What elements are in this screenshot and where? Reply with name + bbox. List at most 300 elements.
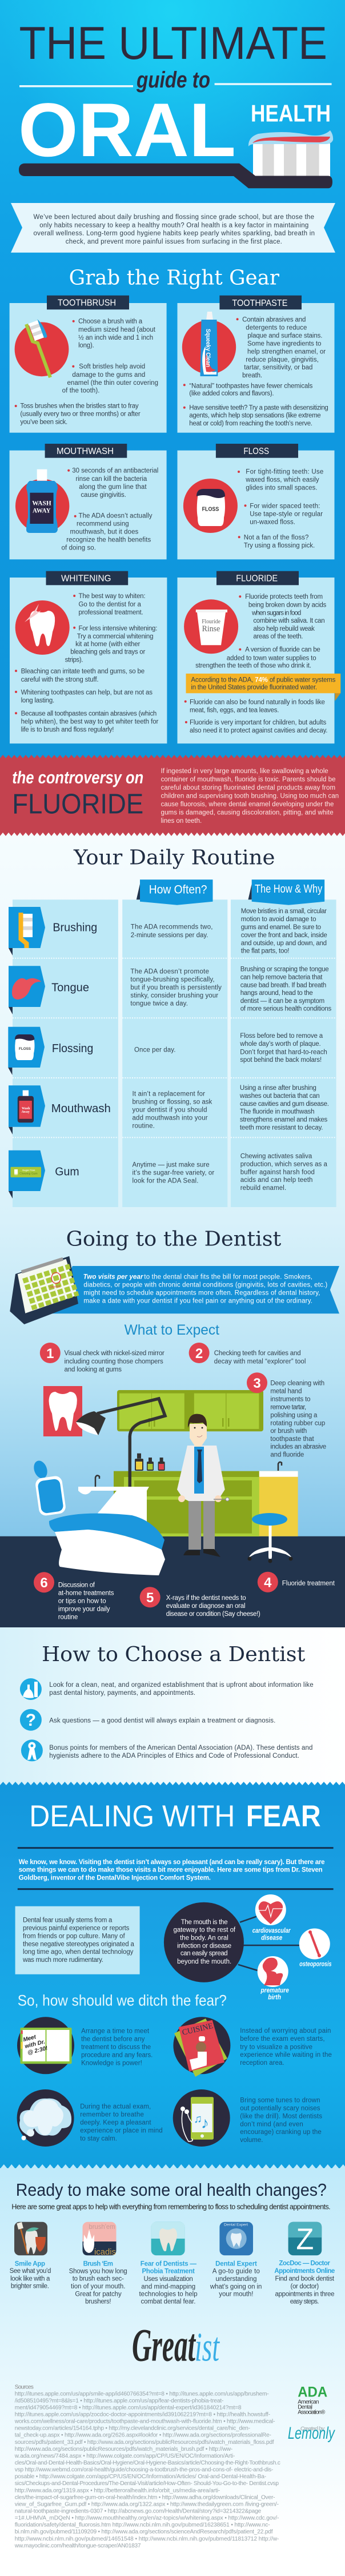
text: fluoride tips: A version of fluoride can be	[245, 646, 320, 653]
app: dental expert: what’s going on in	[210, 2283, 262, 2290]
tip: visualize positive: before the exam even starts,	[240, 2036, 325, 2043]
panel: dental fear	[15, 1906, 140, 1974]
icon: floss container: FLOSS	[202, 507, 219, 513]
icon: notebook	[17, 2017, 74, 2074]
logo: lemonly: Created by	[300, 2426, 325, 2432]
tip: bring tunes	[173, 2089, 322, 2147]
icon: premature birth: birth	[268, 1993, 281, 2001]
sources: fluoridation/safety/dental_fluorosis.htm http://www.ncbi.nlm.nih.gov/pubmed/16238651 • http://www.nc-	[15, 2522, 270, 2529]
tab: toothbrush: TOOTHBRUSH	[58, 298, 116, 308]
tip: visualize positive: reception area.	[240, 2060, 284, 2067]
text: mouthwash tips: rinse can kill the bacteria	[75, 476, 147, 483]
illustration: dental office	[31, 1386, 298, 1575]
tip: ADA members: hygienists adhere to the ADA Principles of Ethics and Code of Professional Conduct.	[49, 1753, 299, 1759]
row: tongue: of more serious health conditions	[240, 1006, 331, 1013]
row: gum: rebuild enamel.	[240, 1185, 286, 1192]
text: fluoride warning: careful about storing fluorinated dental products away from	[161, 785, 335, 791]
text: fluoride tips: also help rebuild weak	[253, 626, 315, 632]
row: tongue: stinky, consider brushing your	[130, 993, 218, 1000]
tip: breathe deeply: During the actual exam,	[80, 2103, 151, 2110]
ribbon: how often: How Often?	[149, 883, 207, 897]
icon: ribbon	[21, 1739, 43, 1761]
text: toothpaste tips: plaque and surface stains.	[247, 333, 322, 340]
step 1: including counting those chompers	[64, 1358, 163, 1365]
tab: fluoride	[216, 571, 299, 585]
step 5	[140, 1587, 260, 1618]
tip: clean office: Look for a clean, neat, and organized establishment that is upfront about information like	[49, 1682, 314, 1689]
text: toothpaste tips	[183, 316, 328, 427]
text: fear intro: some things we can to do make those visits a bit more enjoyable. Here are some tips from Dr. Steven	[19, 1867, 323, 1874]
title: HEALTH	[251, 100, 331, 127]
text: toothpaste tips: tartar, sensitivity, or bad	[244, 364, 312, 371]
app: dental expert	[210, 2222, 262, 2298]
step 2	[189, 1343, 306, 1365]
step 3: or brush with	[270, 1428, 307, 1435]
sources: tal_check-up.aspx • http://www.ada.org/2626.aspx#lookfor • http://www.ada.org/sections/professionalRe-	[15, 2432, 271, 2439]
sources: http://itunes.apple.com/us/app/zocdoc-doctor-appointments/id391062219?mt=8 • http://health.howstuff-	[15, 2412, 270, 2418]
row: gum: Chewing activates saliva	[240, 1153, 312, 1160]
app: zocdoc: easy steps.	[290, 2299, 319, 2306]
tip: arrange a meeting: Arrange a time to meet	[81, 2028, 150, 2035]
sources: =1#.UHMVA_mDQeN • http://www.mouthhealthy.org/en/az-topics/w/whitening.aspx • http://www.cdc.gov/-	[15, 2515, 279, 2522]
tab: mouthwash: MOUTHWASH	[57, 447, 114, 456]
row: brushing: motion to avoid damage to	[241, 916, 316, 923]
heading: grab the right gear: Grab the Right Gear	[69, 266, 279, 290]
tab: toothbrush	[47, 296, 129, 309]
intro banner	[11, 203, 335, 253]
text: fluoride warning: gums is damaged, causing discoloration, pitting, and white	[161, 810, 334, 817]
row: brushing: cover the front and back, inside	[241, 932, 327, 939]
heading: the controversy on fluoride	[12, 767, 143, 819]
tip: ADA members: Bonus points for members of the American Dental Association (ADA). These dentists and	[49, 1745, 312, 1751]
tip: visualize positive: try to visualize a positive	[240, 2044, 312, 2051]
title: THE ULTIMATE	[19, 18, 327, 69]
icon: floss container	[183, 479, 238, 533]
row: tongue: cause bad breath. If bad breath	[240, 982, 326, 989]
row: brushing: gums and enamel. Be sure to	[241, 924, 321, 931]
icon: mouthwash tag: Away	[22, 1110, 30, 1114]
text: toothbrush tips: damage to the gums and	[72, 372, 145, 379]
banner: two visits per year: to the dental chair fits the bill for most people. Smokers,	[144, 1274, 312, 1281]
sources: cles/Oral-and-Dental-Health-Basics/Oral-Hygiene/Oral-Hygiene-Basics/article/Choosing-the-Right-Toothbrush.c	[15, 2460, 280, 2466]
logo: ADA	[298, 2384, 327, 2416]
step 1: and looking at gums	[64, 1366, 122, 1373]
tip: arrange a meeting: the dentist before any	[81, 2036, 145, 2043]
step 3: Deep cleaning with	[270, 1380, 324, 1387]
text: whitening tips: The best way to whiten:	[79, 593, 146, 600]
callout: 74 percent: According to the ADA, 74% of public water systems	[191, 676, 336, 683]
row: brushing	[9, 907, 327, 955]
text: whitening tips: long lasting.	[21, 698, 54, 704]
text: floss tips: Not a fan of the floss?	[244, 534, 308, 541]
sources: Sources	[15, 2384, 34, 2390]
step 6: at-home treatments	[58, 1590, 114, 1597]
app: brush em: Brush ‘Em	[83, 2260, 113, 2267]
text: toothpaste tips: help strengthen enamel, or	[247, 348, 326, 355]
icon: gum tag: Chewing Gum	[19, 1172, 38, 1176]
row: tongue: The ADA doesn’t promote	[130, 969, 209, 976]
step 5: 5	[146, 1590, 154, 1606]
icon: fluoride rinse cup: Flouride	[202, 619, 220, 625]
logo: ADA: ADA	[298, 2384, 327, 2400]
tip: visualize positive: Instead of worrying about pain	[240, 2028, 331, 2034]
step 3	[247, 1372, 326, 1459]
lower cabinets	[114, 1462, 298, 1536]
panel: floss	[177, 444, 335, 559]
step 3: polishing using a	[270, 1412, 318, 1419]
step 4: 4	[264, 1575, 272, 1591]
step 3: includes an abrasive	[270, 1444, 326, 1451]
text: whitening tips: careful with the strong stuff.	[21, 676, 99, 683]
step 3: toothpaste that	[270, 1436, 314, 1443]
app: zocdoc: ZocDoc — Doctor	[279, 2260, 330, 2267]
row: flossing: Flossing	[52, 1042, 93, 1055]
stool	[248, 1513, 292, 1563]
text: toothpaste tips: Some have ingredients to	[247, 340, 321, 347]
row: gum: acids and can help teeth	[240, 1177, 312, 1184]
step 6: Discussion of	[58, 1582, 95, 1588]
text: fluoride tips: combine with saliva. It can	[253, 618, 325, 624]
text: toothpaste tips: detergents to reduce	[246, 325, 307, 332]
tab: toothpaste: TOOTHPASTE	[232, 298, 287, 308]
text: floss tips: Try using a flossing pick.	[244, 543, 315, 550]
app: brush em: to brush each sec-	[73, 2276, 124, 2283]
step 5: disease or condition (Say cheese!)	[166, 1611, 260, 1618]
tab: fluoride: FLUORIDE	[236, 574, 278, 583]
row: brushing: Brushing	[53, 921, 97, 934]
row: tongue: tongue twice a day.	[130, 1001, 188, 1008]
panel: dental fear: previous painful experience or reports	[23, 1925, 130, 1932]
text: mouthwash tips: 30 seconds of an antibacterial	[72, 468, 158, 475]
step 5: X-rays if the dentist needs to	[166, 1595, 246, 1602]
icon: floss tag: FLOSS	[19, 1048, 31, 1051]
text: whitening tips	[15, 593, 159, 733]
icon: notebook: with Dr.	[24, 2039, 46, 2050]
text: whitening tips: For less intensive whitening:	[79, 625, 157, 632]
text: floss tips: For tight-fitting teeth: Use	[246, 469, 323, 476]
sources: vsp http://www.webmd.com/oral-health/guide/choosing-a-tootbrush-the-pros-and-cons-of- electric-and-dis-	[15, 2467, 273, 2473]
text: toothbrush tips: Choose a brush with a	[78, 318, 143, 325]
app: fear of dentists: Uses visualization	[144, 2276, 193, 2283]
sources: bi.nlm.nih.gov/pubmed/11109209 • http://www.ada.org/sections/scienceAndResearch/pdfs/patient_22.pdf	[15, 2529, 273, 2535]
icon: toothpaste tube	[182, 312, 236, 376]
text: fluoride tips: meat, fish, eggs, and tea leaves.	[190, 707, 279, 714]
text: fear intro	[19, 1859, 324, 1882]
icon: question mark	[20, 1709, 42, 1731]
text: floss tips: For wider spaced teeth:	[250, 503, 320, 509]
step 1: Visual check with nickel-sized mirror	[64, 1350, 165, 1357]
icon: gum tag: Sugar Free	[22, 1169, 35, 1172]
diagram: mouth gateway	[164, 1894, 332, 2001]
intro banner: only habits necessary to keep a healthy mouth? Oral health is a key factor in maintaining	[39, 222, 308, 229]
sources: http://www.ada.org/sections/publicResources/pdfs/watch_materials_brush.pdf • http://ww-	[15, 2446, 232, 2452]
step 6: 6	[40, 1575, 48, 1591]
text: whitening tips: Bleaching can irritate teeth and gums, so be	[21, 668, 145, 675]
step 3: remove tartar,	[270, 1404, 306, 1411]
tip: visualize positive: experience while waiting in the	[240, 2052, 332, 2059]
tip: breathe deeply: deeply. Keep a pleasant	[80, 2120, 151, 2127]
icon: brush em	[82, 2222, 117, 2257]
sources: posable • http://www.colgate.com/app/CP/US/EN/OC/Information/Articles/ Oral-and-Dental-Health-Ba-	[15, 2474, 266, 2480]
icon: shining tooth	[15, 600, 70, 655]
row: flossing: spot behind the back molars!	[240, 1057, 322, 1064]
heading: dealing with fear: FEAR	[246, 1799, 321, 1833]
tip: ADA members	[21, 1739, 312, 1761]
icon: calendar: Dentist	[50, 1285, 61, 1289]
tab: whitening	[46, 571, 128, 585]
text: toothpaste tips: heat or cold) from reaching the tooth’s nerve.	[189, 420, 312, 427]
app: fear of dentists: Fear of Dentists —	[141, 2260, 196, 2267]
text: fluoride warning: If ingested in very large amounts, like swallowing a whole	[161, 768, 328, 775]
icon: zocdoc: Z	[296, 2223, 314, 2256]
text: whitening tips: professional treatment.	[79, 609, 143, 616]
icon: toothbrush on red circle	[15, 318, 69, 377]
logo: greatist: ist	[195, 2324, 220, 2370]
row: gum: Gum	[55, 1166, 79, 1178]
app: fear of dentists: technologies to help	[139, 2291, 198, 2298]
app: dental expert: your mouth!	[219, 2291, 253, 2298]
banner: two visits per year: Two visits per year	[83, 1274, 143, 1281]
panel: whitening	[10, 571, 167, 743]
title: guide to	[136, 67, 210, 93]
icon: heart	[252, 1894, 291, 1942]
panel: dental fear: was much more rudimentary.	[22, 1957, 103, 1964]
step 3: 3	[253, 1376, 261, 1391]
text: mouthwash tips: mouthwash, but it does	[70, 529, 139, 536]
row: brushing: 2-minute sessions per day.	[131, 932, 208, 939]
step 2: Checking teeth for cavities and	[214, 1350, 301, 1357]
tip: bring tunes: don’t mind (and even	[240, 2121, 303, 2128]
panel: toothpaste	[177, 296, 335, 433]
text: fluoride warning	[161, 768, 339, 825]
icon: mouthwash bottle: AWAY	[33, 507, 51, 515]
logo: ADA: Association®	[298, 2410, 326, 2416]
row: brushing: Move bristles in a small, circular	[241, 908, 327, 915]
app: dental expert: understanding	[216, 2276, 257, 2283]
icon: notebook: Meet	[22, 2034, 37, 2043]
tab: floss: FLOSS	[243, 447, 269, 456]
text: fluoride tips	[184, 594, 328, 734]
text: toothbrush tips: ½ an inch wide and 1 inch	[78, 335, 153, 341]
app: zocdoc: appointments in three	[275, 2291, 335, 2298]
row: flossing	[8, 1027, 327, 1075]
row: mouthwash: routine.	[133, 1122, 155, 1129]
tip: breathe deeply: experience or place in mind	[80, 2127, 163, 2134]
icon: toothpaste tube: Squeeky Clean	[204, 329, 211, 367]
dentist figure	[177, 1414, 229, 1557]
tab: mouthwash	[45, 444, 127, 458]
text: whitening tips: strips).	[65, 657, 83, 664]
text: toothpaste tips: agents, which help stop sensations (like extreme	[189, 412, 321, 419]
sources: cles/the-impact-of-sugarfree-gum-on-oral-health/index.htm • http://www.adha.org/downloads/Clinical_Over-	[15, 2494, 275, 2501]
app: smile app: See what you’d	[10, 2268, 51, 2275]
banner: two visits per year	[49, 1266, 339, 1313]
text: toothbrush tips	[15, 318, 158, 426]
app: smile app	[10, 2222, 51, 2290]
text: toothpaste tips: Have sensitive teeth? Try a paste with desensitizing	[189, 405, 328, 412]
tip: arrange a meeting	[17, 2017, 153, 2074]
icon: thought bubble	[17, 2089, 74, 2147]
heading: what to expect: What to Expect	[125, 1322, 219, 1338]
icon: broom	[20, 1678, 42, 1700]
upper cabinets	[117, 1390, 263, 1431]
step 3: metal hand	[270, 1388, 302, 1395]
panel: dental fear: Dental fear usually stems from a	[23, 1917, 113, 1924]
text: fluoride warning: cause fluorosis, where dental enamel developing under the	[161, 801, 334, 808]
text: mouthwash tips: along the gum line that	[79, 484, 147, 491]
app: brush em: brushers!	[85, 2299, 111, 2306]
sources: w.ada.org/news/7484.aspx • http://www.colgate.com/app/CP/US/EN/OC/Information/Arti-	[14, 2453, 235, 2459]
row: flossing: whole day’s worth of plaque.	[239, 1041, 321, 1048]
tip: bring tunes: (like the drill). Most dentists	[240, 2113, 322, 2120]
app: brush em: Great for patchy	[75, 2291, 122, 2298]
text: toothpaste tips: Contain abrasives and	[242, 316, 306, 323]
heading: going to the dentist: Going to the Dentist	[66, 1227, 281, 1251]
row: brushing: The ADA recommends two,	[131, 924, 212, 931]
bottles	[135, 1454, 165, 1471]
tip: clean office	[20, 1678, 314, 1700]
intro banner: check, and prevent more painful issues from surfacing in the first place.	[66, 238, 282, 245]
logo: greatist: Great	[132, 2319, 196, 2371]
app: fear of dentists: and mind-mapping	[141, 2283, 195, 2290]
row: mouthwash	[9, 1085, 329, 1134]
row: tongue	[9, 966, 331, 1014]
icon: brush em: icadis	[94, 2247, 116, 2257]
tip: visualize positive	[173, 2017, 332, 2077]
icon: gum tag	[9, 1150, 45, 1199]
step 3: and fluoride	[270, 1452, 304, 1459]
app: smile app: look like with a	[10, 2275, 50, 2282]
app: fear of dentists: combat dental fear.	[141, 2299, 195, 2306]
text: whitening tips: kit at home (with either	[75, 641, 141, 648]
icon: magazine	[173, 2017, 230, 2077]
row: mouthwash: cause cavities and gum disease.	[240, 1101, 329, 1108]
icon: heart: disease	[261, 1934, 282, 1942]
icon: fluoride rinse cup: Rinse	[202, 624, 220, 634]
icon: smile app	[14, 2222, 47, 2255]
step 4	[258, 1572, 335, 1592]
app: dental expert: A go-to guide to	[212, 2268, 260, 2275]
icon: notebook: @ 2:30!	[27, 2045, 49, 2056]
panel: dental fear: long time ago, when dental technology	[23, 1949, 134, 1956]
title: ORAL	[18, 88, 236, 173]
icon: premature birth: premature	[260, 1986, 289, 1994]
intro banner: We’ve been lectured about daily brushing and flossing since grade school, but are those the	[33, 214, 314, 221]
icon: music player	[173, 2089, 230, 2147]
text: mouthwash tips: recommend using	[77, 521, 129, 528]
text: whitening tips: Try a commercial whitening	[77, 633, 153, 640]
text: apps intro: Here are some great apps to help with everything from remembering to floss to scheduling dentist appointments.	[11, 2203, 331, 2211]
text: toothbrush tips: enamel (the thin outer covering	[67, 380, 158, 387]
icon: mouthwash tag: Wash	[22, 1107, 30, 1110]
gateway circle: The mouth is the	[181, 1919, 228, 1926]
tip: arrange a meeting: procedure and any fears.	[81, 2052, 153, 2059]
app: zocdoc	[274, 2222, 335, 2306]
tip: ask questions: Ask questions — a good dentist will always explain a treatment or diagnosis.	[49, 1717, 275, 1724]
step 2: 2	[195, 1346, 203, 1361]
text: floss tips: waxed floss, which easily	[245, 477, 319, 484]
text: toothpaste tips: “Natural” toothpastes have fewer chemicals	[189, 383, 313, 389]
sources: sics/Checkups-and-Dental-Procedures/The-Dental-Visit/article/How-Often- Should-You-Go-to-the- Dentist.cvsp	[15, 2481, 279, 2487]
row: tongue: hangs around, head to the	[240, 990, 313, 997]
icon: question mark: ?	[26, 1711, 36, 1730]
icon: brush em: brush'em	[89, 2223, 115, 2231]
step 6: or tips on how to	[58, 1598, 106, 1605]
logo: ADA: American	[298, 2399, 319, 2406]
text: toothbrush tips: (usually every two or three months) or after	[20, 411, 141, 418]
row: gum: it’s the sugar-free variety, or	[133, 1170, 214, 1177]
row: flossing: Once per day.	[134, 1046, 175, 1053]
icon: magazine: CUISINE	[182, 2022, 214, 2037]
row: mouthwash: Using a rinse after brushing	[240, 1085, 316, 1092]
tip: breathe deeply: remember to breathe	[80, 2111, 144, 2118]
heading: dealing with fear: DEALING WITH	[29, 1799, 235, 1833]
gateway circle: can easily spread	[180, 1950, 228, 1957]
text: floss tips: glides into small spaces.	[246, 485, 318, 492]
text: fluoride tips: being broken down by acids	[248, 602, 327, 608]
row: mouthwash: your dentist if you should	[133, 1107, 207, 1114]
tip: breathe deeply	[17, 2089, 163, 2147]
text: toothpaste tips: (like added colors and flavors).	[189, 391, 274, 397]
text: mouthwash tips	[62, 468, 158, 551]
icon: tongue tag	[9, 966, 45, 1014]
icon: brush tag	[9, 907, 45, 955]
panel: fluoride	[177, 571, 340, 743]
text: toothbrush tips: of the tooth).	[62, 388, 99, 395]
step 3: rotating rubber cup	[270, 1420, 325, 1427]
text: toothbrush tips: medium sized head (about	[78, 327, 156, 333]
icon: mouthwash bottle: WASH	[32, 499, 51, 507]
sources: sources/pdfs/patient_33.pdf • http://www.ada.org/sections/publicResources/pdfs/watch_materials_floss.pdf	[15, 2439, 274, 2446]
panel: dental fear: from friends or pop culture. Many of	[23, 1933, 125, 1940]
text: fluoride tips: areas of the teeth.	[253, 634, 303, 640]
row: tongue: but if you breath is persistently	[130, 985, 222, 992]
row: mouthwash: brushing or flossing, so ask	[133, 1099, 212, 1106]
tab: floss	[216, 444, 298, 458]
row: mouthwash: It ain’t a replacement for	[133, 1091, 205, 1098]
tip: bring tunes: encourage) cranking up the	[240, 2129, 322, 2136]
heading: ready to make changes: Ready to make some oral health changes?	[16, 2180, 327, 2200]
heading: your daily routine: Your Daily Routine	[73, 846, 275, 870]
app: zocdoc: Find and book dentist	[275, 2276, 335, 2283]
heading: the controversy on fluoride: the controversy on	[12, 767, 143, 787]
row: tongue: can help remove bacteria that	[240, 974, 323, 981]
icon: dental expert: Dental Expert	[224, 2223, 248, 2227]
sources	[14, 2384, 280, 2549]
panel: fluoride controversy	[12, 767, 339, 825]
poster: tooth	[43, 1386, 82, 1436]
callout: 74 percent	[186, 674, 340, 701]
sources: /id508510495?mt=8&ls=1 • http://itunes.apple.com/us/app/fear-dentists-phobia-treat-	[15, 2398, 223, 2404]
tip: arrange a meeting: treatment to discuss the	[81, 2044, 151, 2051]
intro banner: overall wellness. Long-term good hygiene habits keep pearly whites sparkling, bad breath in	[33, 230, 315, 237]
logo: ADA: Dental	[298, 2404, 312, 2411]
text: fluoride tips: when sugars in food	[251, 610, 301, 616]
row: gum: buffer against harsh food	[240, 1169, 315, 1176]
icon: fear of dentists	[151, 2222, 185, 2255]
text: fluoride tips: Fluoride is very important for children, but adults	[190, 719, 326, 726]
icon: premature birth	[258, 1956, 289, 2001]
row: mouthwash: washes out bacteria that can	[239, 1093, 320, 1100]
gateway circle	[164, 1902, 244, 1982]
icon: zocdoc	[288, 2222, 322, 2256]
text: floss tips: Use tape-style or regular	[250, 511, 323, 518]
heading: how to choose a dentist: How to Choose a Dentist	[42, 1643, 305, 1666]
step 5: evaluate or diagnose an oral	[166, 1603, 246, 1610]
step 1	[40, 1343, 165, 1373]
text: whitening tips: help whiten), the best way to get whiter teeth for	[21, 718, 159, 725]
text: toothbrush tips: long).	[78, 343, 94, 349]
